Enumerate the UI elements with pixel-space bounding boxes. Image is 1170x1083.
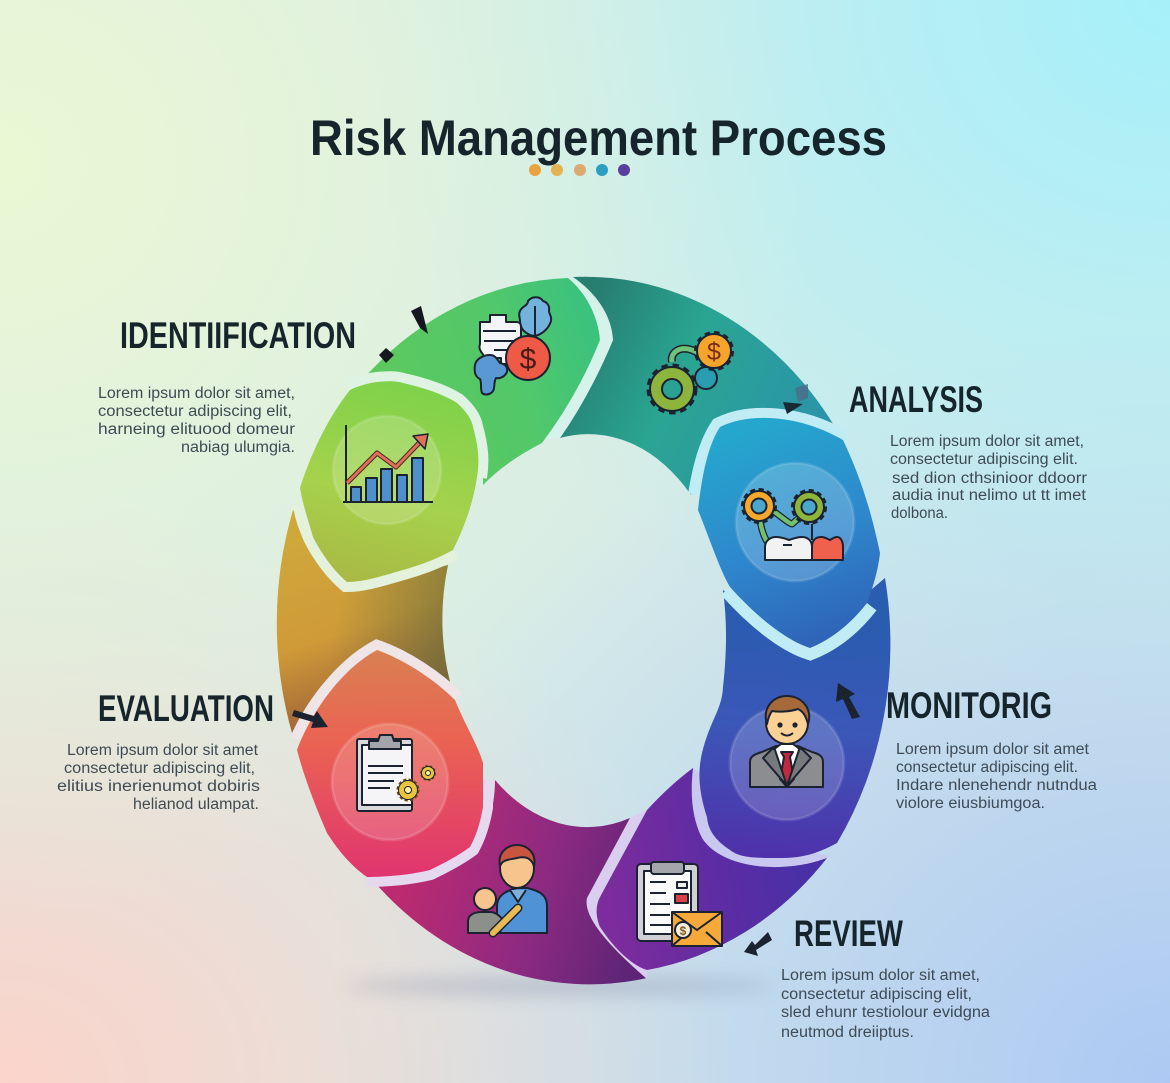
segment: magenta arc [377,780,647,984]
icon: document, leaf and coin [475,297,551,394]
arrow: analysis [783,384,808,414]
segment: orange left arc [277,510,450,733]
text: analysis description: Lorem ipsum dolor sit amet, [890,433,1084,450]
heading: identification: IDENTIIFICATION [120,315,356,356]
text: evaluation description: helianod ulampat. [133,796,259,813]
arrow: evaluation [292,710,328,728]
icon: clipboard with gears [357,735,434,811]
arrow: identification marks [379,306,428,363]
text: evaluation description: consectetur adipiscing elit, [64,760,255,777]
text: review description: consectetur adipiscing elit, [781,986,972,1003]
title: Risk Management Process [310,110,887,166]
segment: lime identification lens [300,381,478,582]
text: monitoring description: Indare nlenehendr nutndua [896,777,1097,794]
title accent dots [529,164,630,176]
heading: analysis: ANALYSIS [849,379,983,420]
text: review description: Lorem ipsum dolor sit amet, [781,967,980,984]
heading: review: REVIEW [794,913,903,954]
text: analysis description: audia inut nelimo ut tt imet [892,487,1087,504]
arrow: monitoring [836,683,860,719]
segment: purple review arc [587,768,827,979]
text: identification description: consectetur adipiscing elit, [98,403,292,420]
icon: gears with dollar: $ [707,338,721,366]
icon: people with pencil [468,845,547,933]
text: monitoring description: violore eiusbiumgoa. [896,795,1045,812]
text: review description: neutmod dreiiptus. [781,1024,914,1041]
text: identification description: nabiag ulumgia. [181,439,295,456]
text: analysis description: consectetur adipiscing elit. [890,451,1078,468]
icon: gears and blocks [744,491,843,560]
text: monitoring description [896,741,1097,812]
text: identification description: Lorem ipsum dolor sit amet, [98,385,295,402]
text: identification description [98,385,295,456]
icon: businessman [750,696,823,787]
text: analysis description [890,433,1087,522]
icon: clipboard and envelope: $ [680,924,687,938]
icon: document, leaf and coin: $ [520,343,537,376]
segment: blue analysis lens [698,418,880,648]
heading: evaluation: EVALUATION [98,688,274,729]
icon: clipboard and envelope [637,862,722,946]
text: monitoring description: Lorem ipsum dolor sit amet [896,741,1090,758]
segment: green arc [365,277,613,485]
heading: monitoring: MONITORIG [886,685,1052,726]
segment: teal analysis arc [560,277,835,495]
text: monitoring description: consectetur adipiscing elit. [896,759,1078,776]
text: evaluation description: Lorem ipsum dolor sit amet [67,742,259,759]
text: evaluation description: elitius inerienumot dobiris [57,778,260,795]
arrow: review [744,932,772,956]
text: analysis description: sed dion cthsinioor ddoorr [892,470,1087,487]
text: evaluation description [57,742,260,813]
icon: gears with dollar [650,334,731,411]
panel: process ring [277,277,890,984]
text: review description: sled ehunr testiolour evidgna [781,1004,990,1021]
text: analysis description: dolbona. [891,505,948,522]
ring shadow [345,977,775,995]
text: identification description: harneing elituood domeur [98,421,295,438]
segment: coral evaluation lens [297,650,483,877]
segment: blue monitoring lens [692,578,890,867]
text: review description [781,967,990,1041]
icon: rising bar chart [343,425,433,502]
